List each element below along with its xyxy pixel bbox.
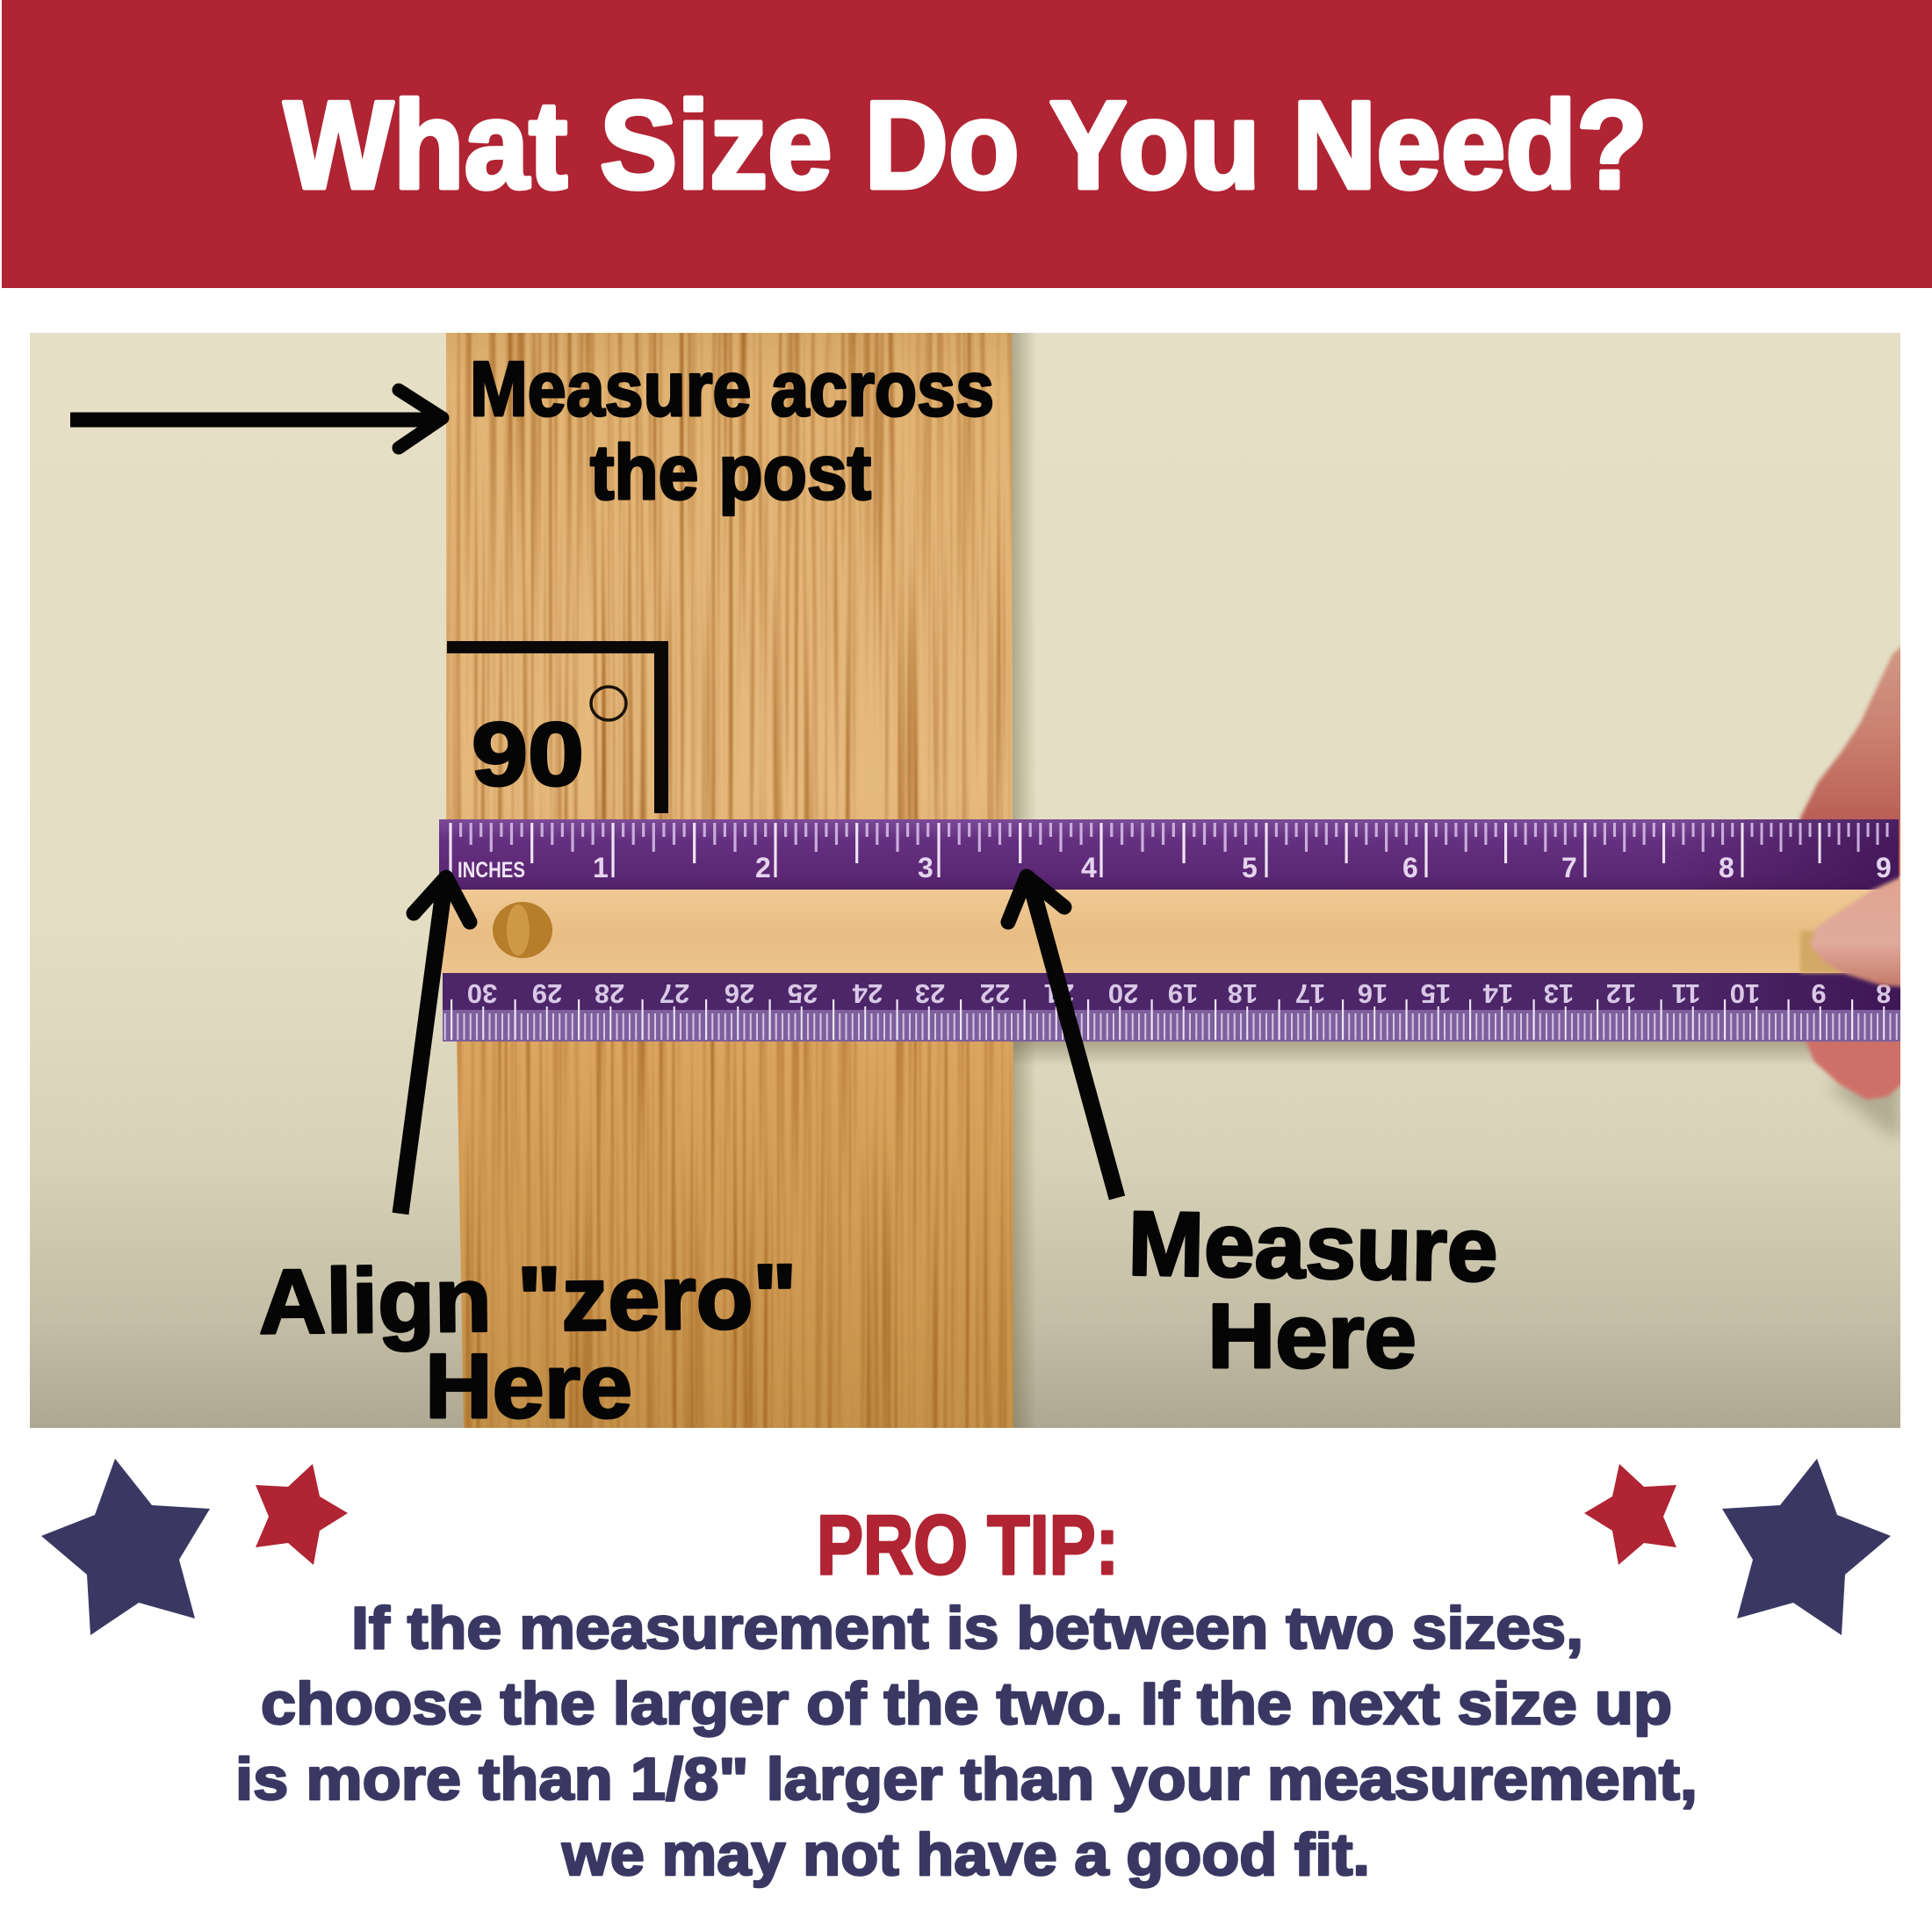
header banner <box>2 0 1932 288</box>
ruler: centimetre scale: 30 <box>467 978 497 1009</box>
label: measure here: Measure <box>1128 1193 1499 1301</box>
ruler: wood strip <box>442 887 1900 975</box>
label: measure across the post <box>470 345 994 515</box>
ruler: centimetre scale: 18 <box>1228 978 1258 1009</box>
ruler: hanging hole <box>493 902 552 958</box>
ruler: centimetre scale: 16 <box>1358 978 1388 1009</box>
title: What Size Do You Need? <box>284 76 1647 215</box>
ruler: inch scale: 2 <box>755 852 771 883</box>
ruler shadow <box>1013 1042 1813 1063</box>
panel: measuring photo <box>30 333 1906 1428</box>
post shadow <box>1012 333 1033 1428</box>
label: align zero here: Align "zero" <box>258 1246 797 1353</box>
ruler: centimetre scale: 17 <box>1295 978 1325 1009</box>
hand: finger below ruler <box>1804 1042 1900 1101</box>
label: align zero here: Here <box>425 1336 632 1438</box>
text block: pro tip body: is more than 1/8" larger than your measurement, <box>235 1746 1698 1813</box>
ruler: centimetre scale: 13 <box>1544 978 1574 1009</box>
ruler: centimetre scale: 26 <box>724 978 754 1009</box>
icon: red star right <box>1584 1464 1676 1565</box>
label: 90 degrees <box>472 687 626 804</box>
label: measure across the post: Measure across <box>470 345 994 432</box>
ruler: centimetre scale: 15 <box>1421 978 1451 1009</box>
ruler: centimetre scale: 23 <box>915 978 945 1009</box>
label: measure here <box>1128 1193 1499 1388</box>
ruler: centimetre scale <box>443 973 1900 1042</box>
right angle bracket <box>447 641 668 813</box>
ruler: centimetre scale: 14 <box>1482 978 1513 1009</box>
icon: red star left <box>256 1464 348 1565</box>
wooden post <box>439 333 1019 1428</box>
wall background <box>30 333 1900 1428</box>
hand: finger above ruler <box>1800 643 1906 878</box>
label: align zero here <box>258 1246 797 1438</box>
ruler: centimetre scale: 11 <box>1672 978 1700 1009</box>
text block: pro tip body: If the measurement is between two sizes, <box>351 1595 1583 1662</box>
label: measure across the post: the post <box>590 429 871 515</box>
ruler <box>439 819 1900 1042</box>
ruler: inch scale: 8 <box>1719 852 1734 883</box>
finger shadow <box>1829 1081 1900 1142</box>
ruler: centimetre scale: 22 <box>980 978 1010 1009</box>
ruler: inch scale: INCHES <box>458 858 525 883</box>
ruler: centimetre scale: 8 <box>1876 978 1892 1009</box>
ruler: centimetre scale: 12 <box>1606 978 1636 1009</box>
ruler: centimetre scale: 19 <box>1168 978 1198 1009</box>
ruler: inch scale: 7 <box>1561 852 1577 883</box>
hand: thumb over ruler <box>1800 875 1906 987</box>
ruler: centimetre scale: 9 <box>1811 978 1827 1009</box>
arrow: measure across the post <box>70 390 443 448</box>
ruler: inch scale: 6 <box>1402 852 1418 883</box>
ruler: centimetre scale: 28 <box>595 978 624 1009</box>
ruler: centimetre scale: 25 <box>788 978 818 1009</box>
ruler: inch scale: 9 <box>1876 852 1892 883</box>
icon: navy star right <box>1722 1459 1891 1635</box>
text block: pro tip body: we may not have a good fit. <box>561 1821 1370 1888</box>
ruler: inch scale <box>439 819 1899 890</box>
label: 90 degrees: 90 <box>472 704 584 804</box>
ruler: centimetre scale: 21 <box>1044 978 1074 1009</box>
ruler: centimetre scale: 10 <box>1730 978 1760 1009</box>
arrow: align zero <box>400 877 470 1214</box>
text block: pro tip body: choose the larger of the two. If the next size up <box>261 1670 1672 1737</box>
ruler: inch scale: 3 <box>918 852 934 883</box>
ruler: inch scale: 1 <box>593 852 609 883</box>
ruler: centimetre scale: 24 <box>852 978 883 1009</box>
ruler: centimetre scale: 27 <box>660 978 689 1009</box>
ruler: centimetre scale: 29 <box>532 978 562 1009</box>
ruler: inch scale: 5 <box>1242 852 1258 883</box>
text block: pro tip body <box>235 1595 1698 1888</box>
ruler: inch scale: 4 <box>1081 852 1097 883</box>
heading: pro tip: PRO TIP: <box>817 1498 1119 1592</box>
arrow: measure here <box>1008 876 1117 1198</box>
label: measure here: Here <box>1208 1286 1417 1388</box>
ruler: centimetre scale: 20 <box>1108 978 1138 1009</box>
icon: navy star left <box>41 1459 210 1635</box>
